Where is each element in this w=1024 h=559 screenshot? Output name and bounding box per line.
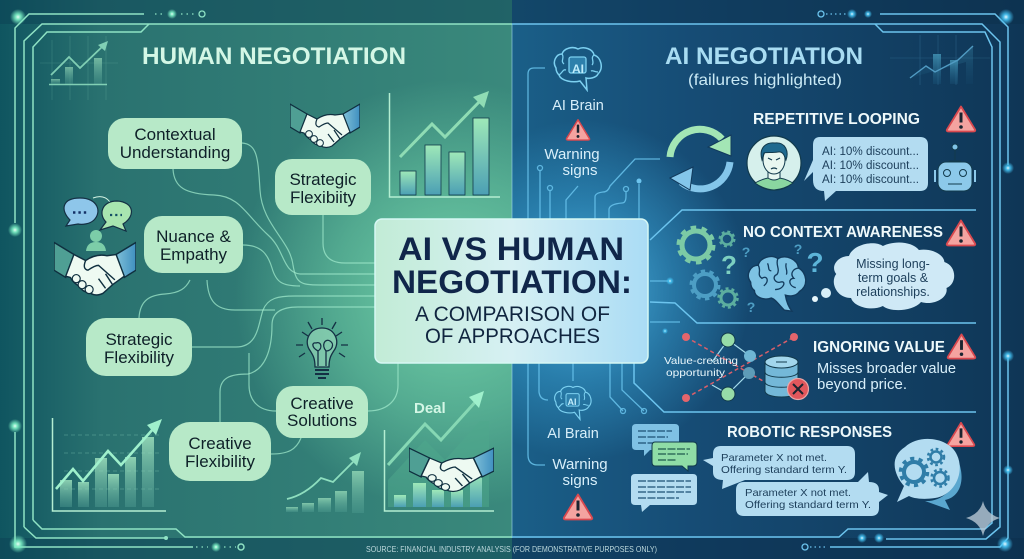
pill: creative flexibility: Creative [188, 434, 252, 453]
icon: warning context [947, 220, 975, 246]
diagram: value network crossed out: Value-creating [664, 355, 738, 367]
icon: light bulb [296, 318, 348, 378]
icon: gears and question marks: ? [794, 241, 802, 257]
bar chart: lower left growth [52, 418, 166, 511]
speech bubble: standard term two: Parameter X not met. [745, 487, 851, 499]
background: human side [0, 0, 512, 559]
icon: AI brain bottom: AI [568, 397, 576, 407]
label: AI brain bottom: AI Brain [547, 426, 599, 442]
central title panel: OF APPROACHES [425, 325, 600, 348]
pill: nuance and empathy [144, 216, 243, 273]
icon: speech bubbles and person [64, 197, 131, 251]
pill: contextual understanding: Contextual [134, 125, 216, 144]
diagram: value network crossed out: opportunity [666, 367, 726, 379]
icon: robot [935, 144, 975, 191]
heading: repetitive looping: REPETITIVE LOOPING [753, 111, 920, 128]
label: warning signs top [544, 146, 600, 179]
pill: strategic flexibility top: Strategic [289, 170, 357, 189]
heading: AI negotiation [665, 43, 863, 89]
speech bubble: standard term two [736, 472, 888, 516]
frame: left circuit border [8, 9, 512, 553]
speech bubble: standard term one: Parameter X not met. [721, 452, 827, 464]
icon: warning bottom left [564, 494, 592, 520]
heading: robotic responses: ROBOTIC RESPONSES [727, 424, 892, 441]
right connector lines [528, 68, 680, 465]
speech bubble: repeated discounts: AI: 10% discount... [822, 174, 919, 186]
icon: handshake left [54, 242, 136, 295]
icon: warning value [948, 334, 975, 359]
bar chart: top growth [390, 91, 500, 197]
icon: gears and question marks: ? [721, 250, 737, 280]
pill: contextual understanding [108, 118, 242, 169]
speech bubble: standard term one: Offering standard term Y. [721, 464, 847, 476]
label: warning signs bottom: signs [562, 472, 598, 489]
pill: strategic flexibility lower: Flexibility [104, 348, 174, 367]
icon: warning top [566, 120, 590, 140]
pill: creative solutions [276, 386, 368, 438]
heading: AI negotiation: (failures highlighted) [688, 72, 842, 89]
icon: gears and question marks: ? [742, 244, 750, 260]
central title panel: NEGOTIATION: [392, 264, 632, 300]
icon: gears and question marks: ? [806, 247, 824, 278]
text: misses broader value: beyond price. [817, 377, 907, 393]
pill: creative flexibility: Flexibility [185, 452, 255, 471]
pill: creative solutions: Creative [290, 394, 354, 413]
pill: strategic flexibility lower: Strategic [105, 330, 173, 349]
icon: warning robotic [948, 423, 974, 446]
speech bubble: standard term two: Offering standard term Y. [745, 499, 871, 511]
background: AI side [512, 0, 1024, 559]
thought cloud: missing goals [812, 243, 954, 310]
heading: ignoring value: IGNORING VALUE [813, 339, 945, 356]
icon: frustrated person [747, 136, 801, 190]
frame: right circuit border [512, 9, 1014, 552]
icon: database with error [765, 356, 808, 400]
central title panel: AI VS HUMAN [398, 231, 624, 267]
icon: AI brain top [554, 48, 601, 90]
central title panel: A COMPARISON OF [415, 303, 610, 326]
thought cloud: missing goals: Missing long- [856, 257, 930, 271]
thought cloud: missing goals: relationships. [856, 285, 930, 299]
speech bubble: standard term one [703, 446, 855, 489]
speech bubble: repeated discounts: AI: 10% discount... [822, 160, 919, 172]
icon: faint chart top right [890, 35, 990, 85]
label: deal chart: Deal [414, 400, 446, 417]
icon: gears and question marks [678, 228, 824, 315]
bar chart: mid growth [286, 452, 364, 513]
icon: faint chart top left [40, 36, 118, 100]
pill: nuance and empathy: Empathy [160, 245, 228, 264]
label: warning signs top: Warning [544, 146, 600, 163]
pill: creative solutions: Solutions [287, 411, 357, 430]
label: warning signs top: signs [562, 162, 598, 179]
label: AI brain top: AI Brain [552, 98, 604, 114]
label: deal chart [384, 391, 494, 511]
source note: SOURCE: FINANCIAL INDUSTRY ANALYSIS (FOR DEMONSTRATIVE PURPOSES ONLY) [366, 545, 657, 554]
heading: AI negotiation: AI NEGOTIATION [665, 43, 863, 70]
text: misses broader value [817, 361, 956, 393]
label: warning signs bottom [552, 456, 608, 489]
thought cloud: missing goals: term goals & [858, 271, 929, 285]
icon: AI brain top: AI [572, 62, 584, 76]
icon: cycle arrows [670, 129, 731, 190]
central title panel [375, 219, 648, 363]
pill: nuance and empathy: Nuance & [156, 227, 231, 246]
icon: handshake top [290, 104, 360, 148]
icon: speech bubble with gears [895, 439, 962, 510]
pill: creative flexibility [169, 422, 271, 481]
icon: AI brain bottom [555, 386, 591, 419]
pill: strategic flexibility top [275, 159, 371, 215]
heading: human negotiation: HUMAN NEGOTIATION [142, 43, 406, 70]
icon: brain [748, 257, 806, 311]
label: warning signs bottom: Warning [552, 456, 608, 473]
icon: warning looping [947, 106, 975, 132]
pill: strategic flexibility lower [86, 318, 192, 376]
speech bubble: repeated discounts: AI: 10% discount... [822, 146, 919, 158]
icon: sparkle [966, 501, 1000, 536]
pill: strategic flexibility top: Flexibiity [290, 188, 357, 207]
heading: no context awareness: NO CONTEXT AWARENESS [743, 224, 943, 241]
diagram: value network crossed out [664, 333, 798, 402]
text: misses broader value: Misses broader value [817, 361, 956, 377]
left connector lines [139, 143, 398, 454]
icon: small chat bubbles [631, 424, 697, 512]
icon: gears and question marks: ? [747, 299, 755, 315]
icon: handshake deal [409, 448, 494, 492]
pill: contextual understanding: Understanding [120, 143, 230, 162]
section dividers [634, 210, 976, 412]
speech bubble: repeated discounts [804, 137, 928, 201]
